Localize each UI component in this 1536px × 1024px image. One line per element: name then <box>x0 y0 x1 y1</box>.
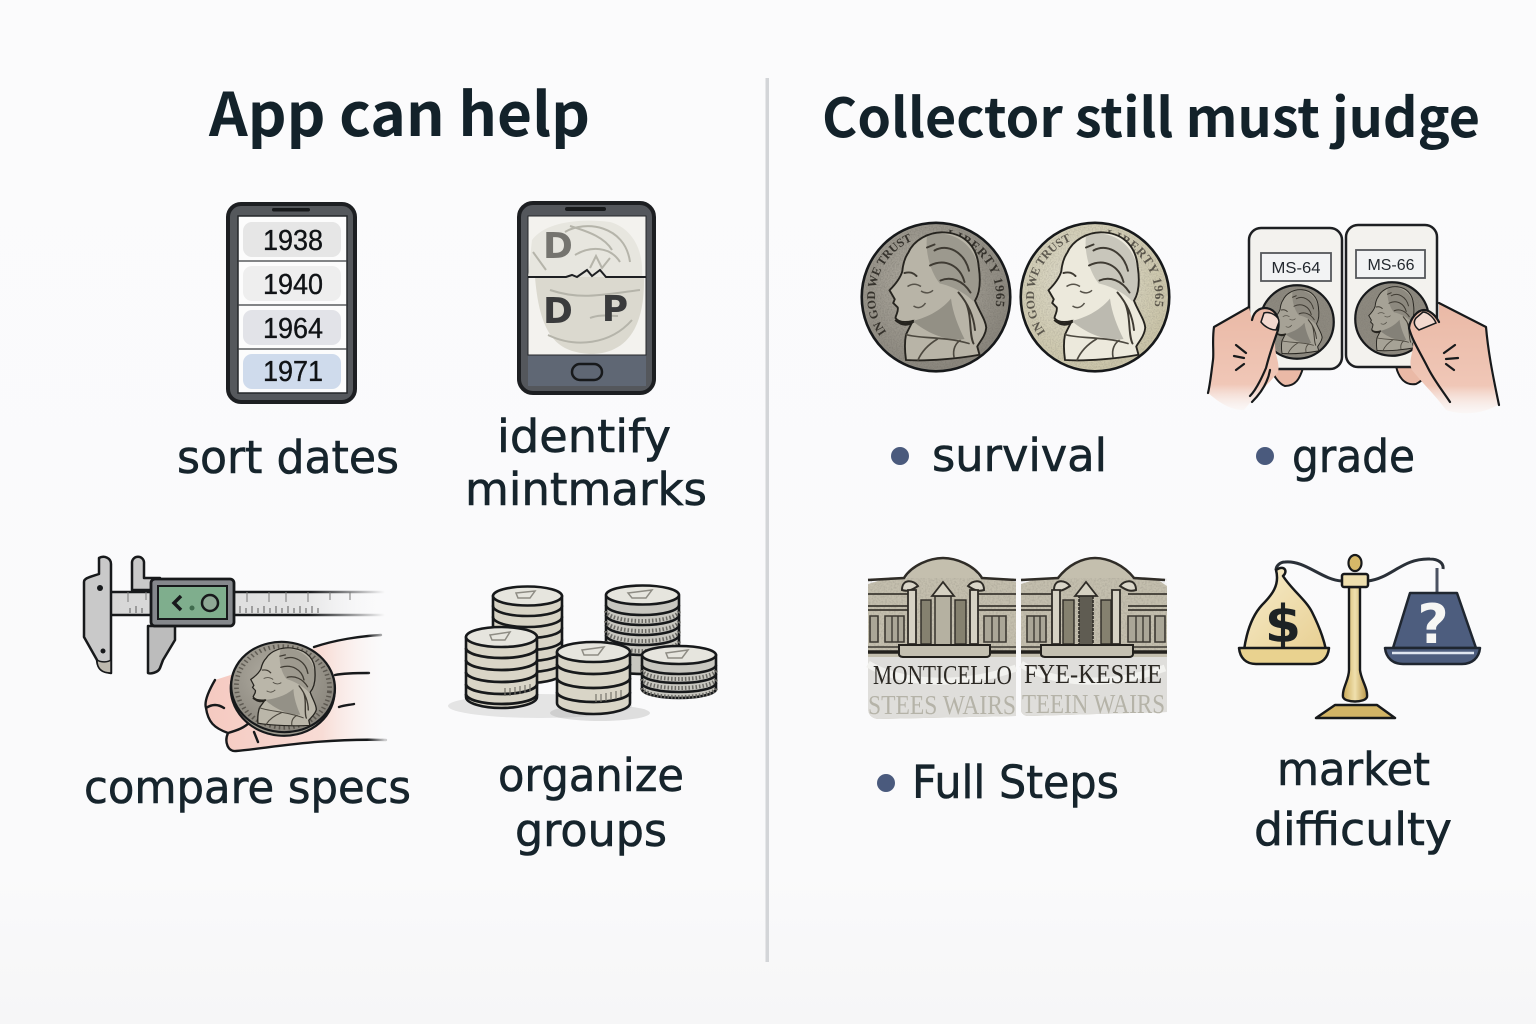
panel: market difficulty <box>1239 555 1480 856</box>
scale arms <box>1276 559 1443 581</box>
icon: stacks of coins <box>448 586 716 721</box>
icon: balance scale: ? <box>1417 593 1449 656</box>
label: compare specs: compare specs <box>84 761 411 814</box>
icon: Monticello right <box>1021 558 1167 719</box>
label: grade: grade <box>1292 430 1415 483</box>
bullet <box>877 774 895 792</box>
icon: balance scale: $ <box>1265 595 1301 655</box>
panel: grade <box>1208 225 1499 483</box>
left thumbnail <box>1261 313 1279 330</box>
label: sort dates: sort dates <box>177 431 399 484</box>
icon: Monticello right: TEEIN WAIRS <box>1022 689 1165 719</box>
stack back right <box>606 586 679 674</box>
panel: organize groups <box>448 586 716 857</box>
icon: slab MS-66: MS-66 <box>1368 257 1415 274</box>
label: identify mintmarks: identify <box>497 410 671 463</box>
icon: worn nickel: IN GOD WE TRUST <box>867 234 911 336</box>
icon: left hand <box>1208 307 1279 410</box>
scale post <box>1343 587 1367 702</box>
icon: phone with date list <box>228 204 355 402</box>
stack right <box>642 646 716 698</box>
icon: right hand <box>1409 303 1498 413</box>
icon: Monticello left <box>868 558 1016 720</box>
panel: survival <box>860 222 1171 482</box>
icon: hands with back fingers <box>1268 365 1432 386</box>
label: market difficulty: difficulty <box>1254 803 1452 856</box>
bullet <box>1256 447 1274 465</box>
label: identify mintmarks <box>465 410 707 516</box>
money bag <box>1244 568 1326 650</box>
date list: 1971 <box>263 356 323 388</box>
icon: slab MS-66 <box>1346 225 1437 367</box>
panel: Full Steps <box>868 558 1167 809</box>
scale base <box>1316 705 1395 718</box>
icon: bright nickel: IN GOD WE TRUST <box>1026 234 1070 336</box>
icon: slab MS-64: MS-64 <box>1272 260 1321 277</box>
label: market difficulty <box>1254 743 1452 856</box>
mintmark letters: D <box>543 291 573 332</box>
icon: Monticello left: MONTICELLO <box>873 660 1012 690</box>
right thumbnail <box>1414 312 1436 330</box>
panel: sort dates <box>177 204 399 484</box>
icon: bright nickel: LIBERTY 1965 <box>1108 230 1164 306</box>
label: survival: survival <box>932 429 1107 482</box>
question weight <box>1436 568 1438 593</box>
label: market difficulty: market <box>1277 743 1430 796</box>
date list <box>263 225 323 388</box>
stack front center <box>557 642 630 714</box>
icon: phone with mintmark coin views <box>519 203 654 393</box>
stack back left <box>493 586 562 683</box>
label: Full Steps: Full Steps <box>912 756 1119 809</box>
icon: hand holding nickel <box>205 635 386 751</box>
mintmark letters: P <box>602 289 628 330</box>
icon: caliper <box>84 557 386 673</box>
nickel <box>226 637 339 741</box>
date list: 1940 <box>263 269 323 301</box>
icon: balance scale <box>1239 555 1480 718</box>
icon: Monticello left: STEES WAIRS <box>868 690 1016 720</box>
mintmark letters <box>543 226 628 332</box>
stack front left <box>466 627 537 708</box>
center divider <box>766 78 769 962</box>
label: organize groups <box>498 749 684 857</box>
icon: slab MS-64 <box>1249 228 1342 369</box>
icon: Monticello right: FYE-KESEIE <box>1024 659 1162 689</box>
heading: Collector still must judge: Collector still must judge <box>822 74 1480 153</box>
label: organize groups: groups <box>515 804 667 857</box>
icon: bright nickel <box>1019 222 1171 373</box>
mintmark letters: D <box>543 226 573 267</box>
panel: identify mintmarks <box>465 203 707 516</box>
panel: compare specs <box>84 557 411 814</box>
bullet <box>891 447 909 465</box>
label: organize groups: organize <box>498 749 684 802</box>
right hand outline <box>1409 303 1499 405</box>
label: identify mintmarks: mintmarks <box>465 463 707 516</box>
heading: App can help: App can help <box>208 67 590 154</box>
icon: worn nickel <box>860 222 1012 373</box>
date list: 1964 <box>263 313 323 345</box>
left hand outline <box>1208 307 1279 402</box>
icon: worn nickel: LIBERTY 1965 <box>948 230 1005 306</box>
date list: 1938 <box>263 225 323 257</box>
